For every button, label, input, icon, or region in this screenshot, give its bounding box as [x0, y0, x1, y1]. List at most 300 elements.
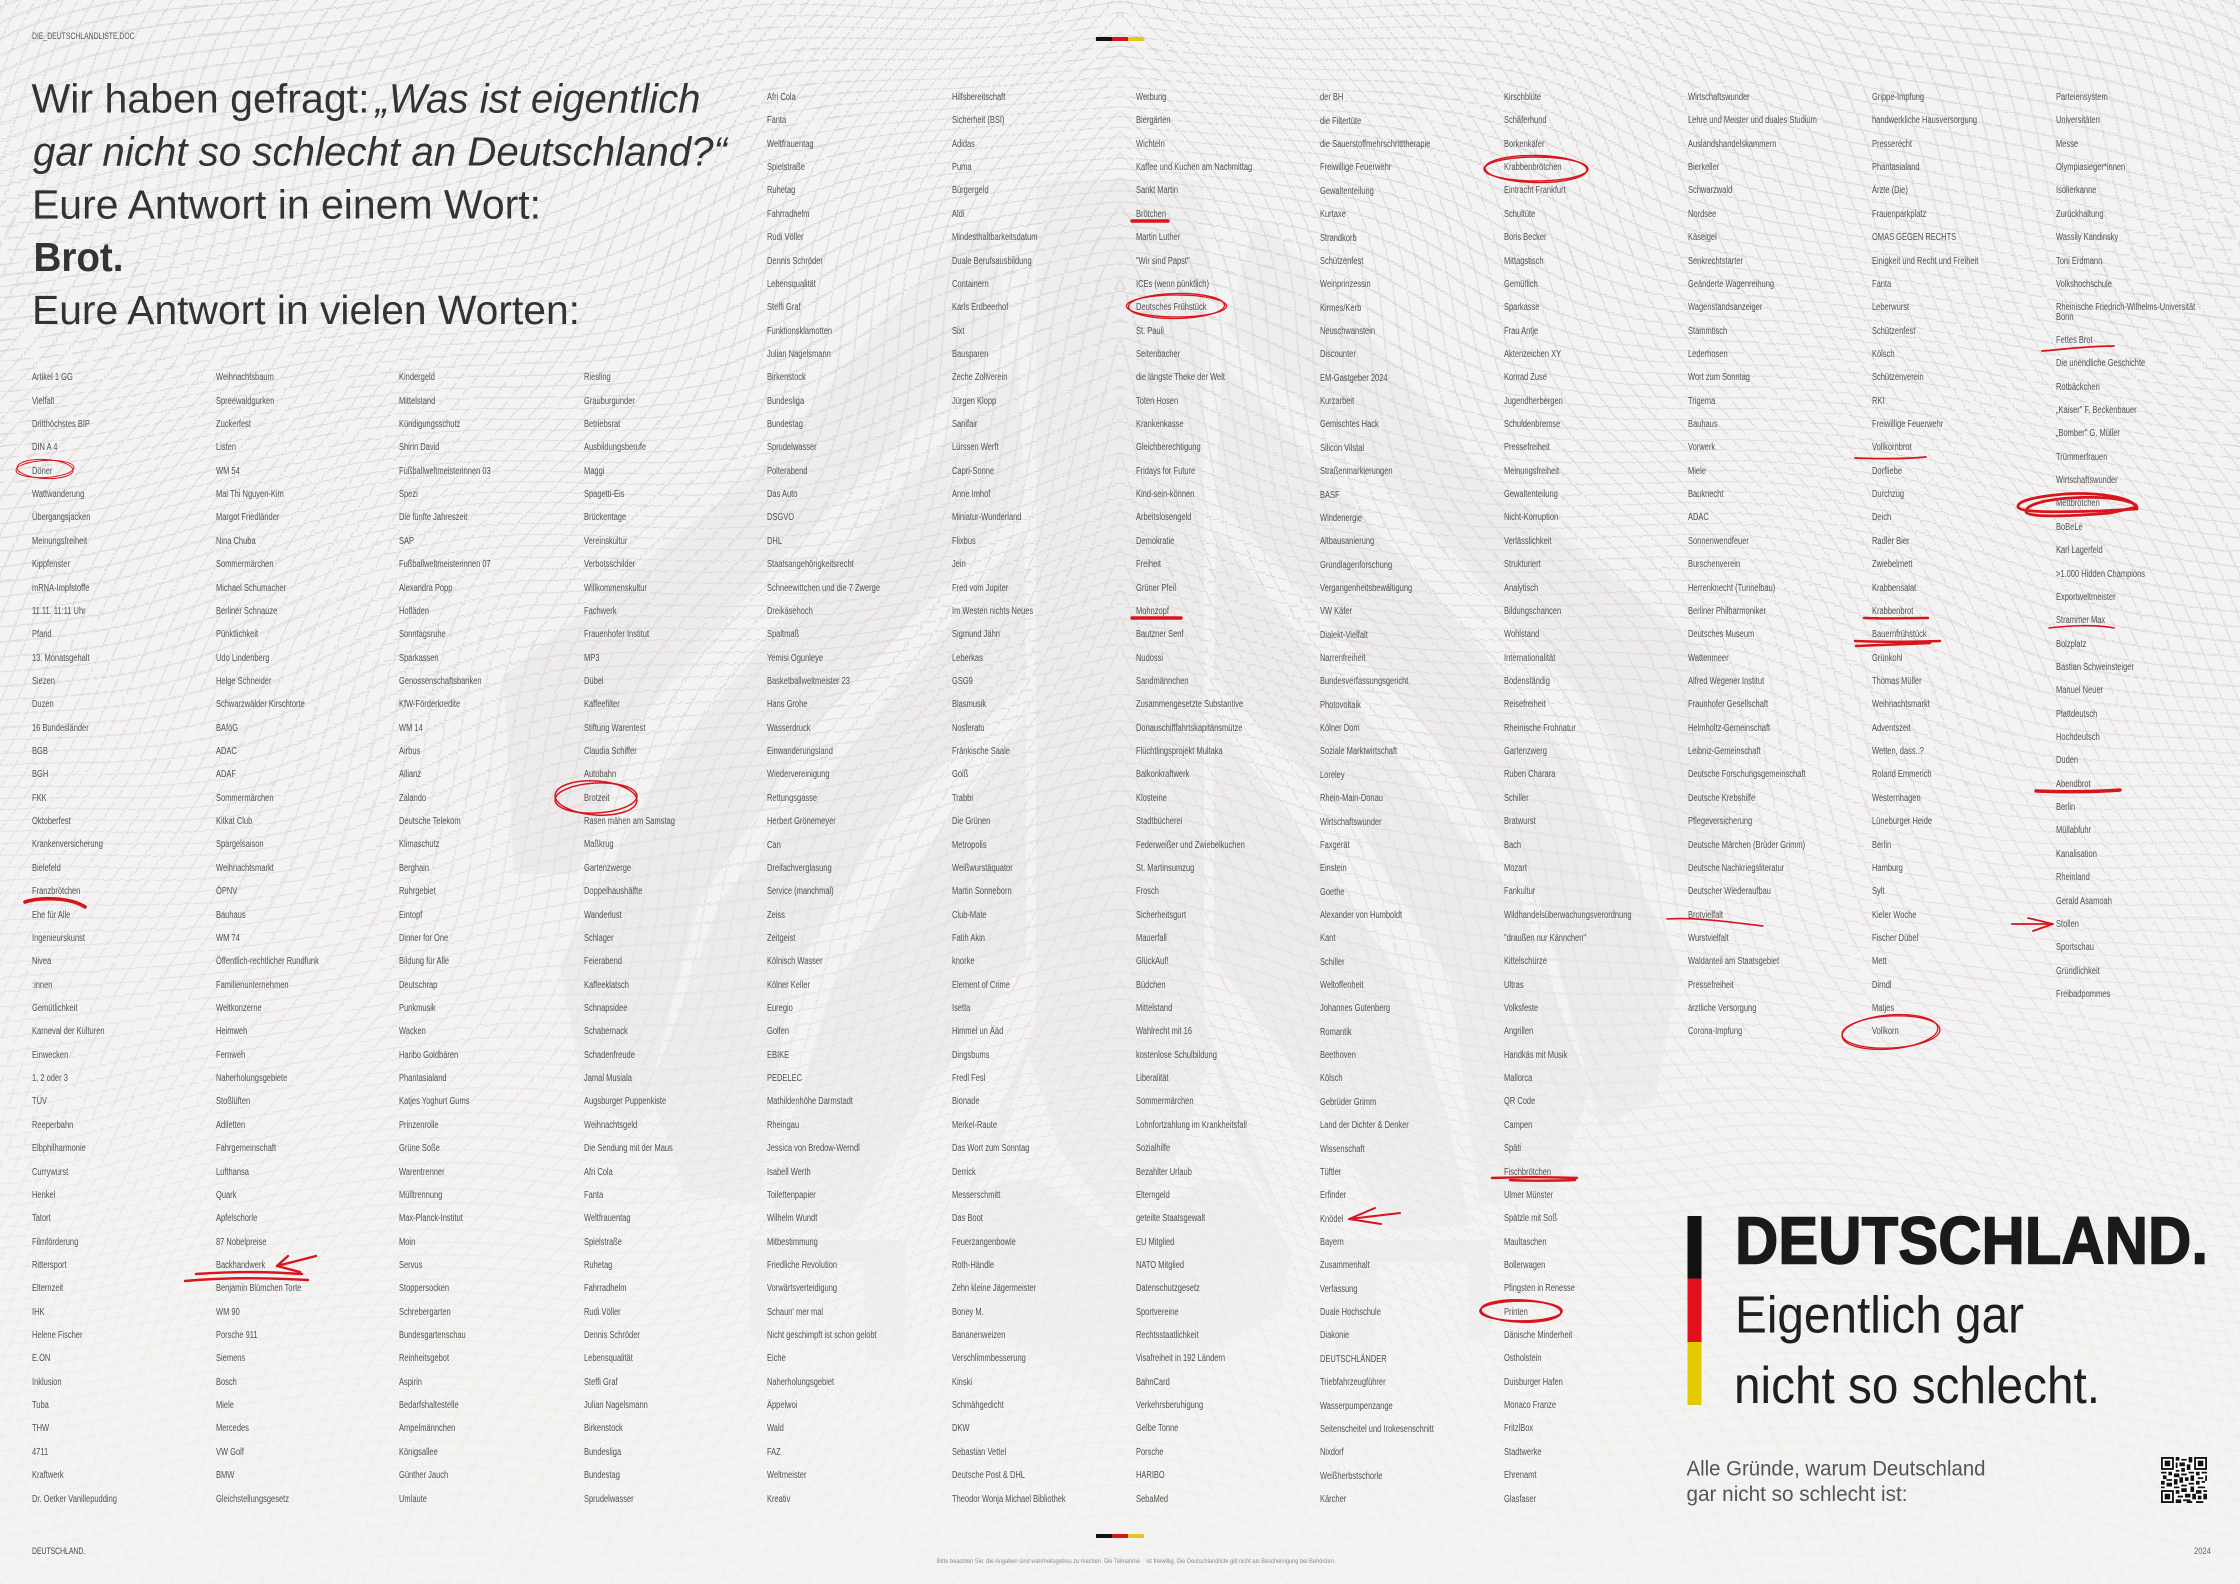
answer column 9: Schultüte	[1504, 209, 1535, 220]
answer column 6: Fränkische Saale	[952, 746, 1010, 757]
answer column 2: Weihnachtsbaum	[216, 372, 274, 383]
answer column 3: Allianz	[399, 769, 421, 780]
answer column 2: Quark	[216, 1190, 236, 1201]
answer column 4: Grauburgunder	[584, 396, 634, 407]
answer column 9: Frau Antje	[1504, 326, 1538, 337]
answer column 5: Äppelwoi	[767, 1400, 798, 1411]
answer column 5: Bundestag	[767, 419, 803, 430]
answer column 11: Krabbenbrot	[1872, 606, 1913, 617]
answer column 9: Fischbrötchen	[1504, 1167, 1551, 1178]
answer column 2: Siemens	[216, 1353, 245, 1364]
answer column 4: Spagetti-Eis	[584, 489, 624, 500]
answer column 6: Bürgergeld	[952, 185, 988, 196]
answer column 12: Rheinland	[2056, 872, 2090, 883]
answer column 5	[767, 92, 880, 1505]
answer column 9: Bildungschancen	[1504, 606, 1561, 617]
answer column 5: Service (manchmal)	[767, 886, 834, 897]
answer column 8: die Filtertüte	[1320, 116, 1361, 127]
answer column 5: Golfen	[767, 1026, 789, 1037]
answer column 8: VW Käfer	[1320, 606, 1352, 617]
answer column 3: Klimaschutz	[399, 839, 440, 850]
headline: Eure Antwort in vielen Worten:	[32, 287, 580, 333]
answer column 7: Freiheit	[1136, 559, 1161, 570]
answer column 5: PEDELEC	[767, 1073, 802, 1084]
answer column 6: Aldi	[952, 209, 964, 220]
answer column 6: Zeche Zollverein	[952, 372, 1007, 383]
answer column 9: Schuldenbremse	[1504, 419, 1560, 430]
answer column 2: Benjamin Blümchen Torte	[216, 1283, 301, 1294]
answer column 8: Romantik	[1320, 1027, 1352, 1038]
answer column 4: MP3	[584, 653, 599, 664]
answer column 1: Kraftwerk	[32, 1470, 63, 1481]
answer column 8: Kurzarbeit	[1320, 396, 1354, 407]
answer column 6: Karls Erdbeerhof	[952, 302, 1008, 313]
underline: Strammer Max	[2049, 626, 2114, 628]
answer column 3: Die fünfte Jahreszeit	[399, 512, 468, 523]
headline: Eure Antwort in einem Wort:	[32, 181, 541, 227]
answer column 8: Duale Hochschule	[1320, 1307, 1381, 1318]
answer column 9: Monaco Franze	[1504, 1400, 1556, 1411]
headline: Wir haben gefragt:	[32, 76, 370, 122]
answer column 9: Bach	[1504, 840, 1521, 850]
answer column 11: Grünkohl	[1872, 653, 1902, 664]
answer column 5: Julian Nagelsmann	[767, 349, 831, 360]
answer column 6: Das Wort zum Sonntag	[952, 1143, 1029, 1154]
answer column 9: Späti	[1504, 1143, 1521, 1154]
answer column 5: Weltmeister	[767, 1470, 807, 1481]
answer column 8	[1320, 92, 1434, 1505]
answer column 9: Dänische Minderheit	[1504, 1330, 1573, 1341]
answer column 1: Inklusion	[32, 1377, 61, 1388]
answer column 10: Corona-Impfung	[1688, 1026, 1742, 1037]
answer column 8: Wirtschaftswunder	[1320, 817, 1382, 828]
answer column 2: Porsche 911	[216, 1330, 257, 1341]
answer column 7: Flüchtlingsprojekt Multaka	[1136, 746, 1222, 757]
answer column 4: Die Sendung mit der Maus	[584, 1143, 672, 1154]
answer column 6: Dingsbums	[952, 1050, 989, 1061]
year: 2024	[2194, 1546, 2211, 1556]
answer column 2: Margot Friedländer	[216, 512, 279, 523]
circle: Brotzeit	[554, 778, 638, 818]
answer column 7: Nudossi	[1136, 653, 1163, 664]
answer column 5: Rheingau	[767, 1120, 800, 1131]
answer column 7: Gelbe Tonne	[1136, 1423, 1178, 1434]
flag bar bottom	[1096, 1534, 1144, 1538]
scribble: Mettbrötchen	[2018, 494, 2137, 516]
answer column 9: Schiller	[1504, 793, 1529, 804]
answer column 1: BGB	[32, 746, 47, 757]
answer column 1: 4711	[32, 1447, 48, 1458]
answer column 12: >1.000 Hidden Champions	[2056, 569, 2145, 580]
answer column 10: ADAC	[1688, 512, 1709, 523]
answer column 9: Strukturiert	[1504, 559, 1541, 570]
answer column 3: Hofläden	[399, 606, 429, 617]
answer column 2: Sommermärchen	[216, 559, 273, 570]
answer column 5: Schaun' mer mal	[767, 1307, 823, 1318]
answer column 1: Meinungsfreiheit	[32, 536, 87, 547]
answer column 12: Gerald Asamoah	[2056, 896, 2112, 907]
answer column 9: Kirschblüte	[1504, 92, 1541, 103]
answer column 5: Yemisi Ogunleye	[767, 653, 823, 664]
answer column 10: Bauhaus	[1688, 419, 1718, 430]
answer column 6: DKW	[952, 1423, 969, 1434]
answer column 8: Soziale Marktwirtschaft	[1320, 746, 1397, 757]
answer column 8: Verfassung	[1320, 1284, 1358, 1295]
answer column 8: Kölsch	[1320, 1073, 1343, 1084]
answer column 9: Borkenkäfer	[1504, 139, 1545, 150]
answer column 8: Bayern	[1320, 1237, 1344, 1248]
answer column 6: Fatih Akin	[952, 933, 985, 944]
answer column 12: Strammer Max	[2056, 615, 2105, 626]
answer column 1: Siezen	[32, 676, 54, 687]
eagle watermark	[504, 180, 1736, 1405]
answer column 3: Fußballweltmeisterinnen 07	[399, 559, 491, 570]
answer column 3: Shirin David	[399, 442, 440, 453]
answer column 3: Zalando	[399, 793, 426, 804]
answer column 7: EU Mitglied	[1136, 1237, 1174, 1248]
answer column 4: Gartenzwerge	[584, 863, 631, 874]
answer column 9: Printen	[1504, 1307, 1528, 1318]
answer column 8: Wissenschaft	[1320, 1144, 1365, 1155]
answer column 11: Fischer Dübel	[1872, 933, 1918, 944]
answer column 9: Stadtwerke	[1504, 1447, 1542, 1458]
answer column 7: Sozialhilfe	[1136, 1143, 1170, 1154]
answer column 8: Weltoffenheit	[1320, 980, 1364, 991]
answer column 11: RKI	[1872, 396, 1885, 407]
answer column 7: Wahlrecht mit 16	[1136, 1026, 1192, 1037]
answer column 8: Straßenmarkierungen	[1320, 466, 1393, 477]
answer column 11: Presserecht	[1872, 139, 1912, 150]
answer column 10: Lehre und Meister und duales Studium	[1688, 115, 1817, 126]
answer column 11: Zwiebelmett	[1872, 559, 1912, 570]
answer column 12: Müllabfuhr	[2056, 825, 2091, 836]
call to action	[1686, 1458, 1986, 1506]
answer column 9: Schäferhund	[1504, 115, 1547, 126]
answer column 3: Haribo Goldbären	[399, 1050, 459, 1061]
answer column 9: Volksfeste	[1504, 1003, 1538, 1014]
answer column 1: Pfand	[32, 629, 51, 640]
answer column 7: Wichteln	[1136, 139, 1164, 150]
answer column 1: 11.11. 11:11 Uhr	[32, 606, 85, 617]
answer column 11: Krabbensalat	[1872, 583, 1916, 594]
answer column 7: Sportvereine	[1136, 1307, 1178, 1318]
answer column 6: Schmähgedicht	[952, 1400, 1003, 1411]
answer column 6: Himmel un Ääd	[952, 1026, 1003, 1037]
answer column 4: Maggi	[584, 466, 604, 477]
answer column 10: Pressefreiheit	[1688, 980, 1734, 991]
answer column 10: Sonnenwendfeuer	[1688, 536, 1749, 547]
answer column 8: Faxgerät	[1320, 840, 1350, 851]
answer column 1: Helene Fischer	[32, 1330, 82, 1341]
answer column 7: Büdchen	[1136, 980, 1165, 991]
answer column 5: Zeiss	[767, 910, 785, 921]
answer column 4: Weltfrauentag	[584, 1213, 630, 1224]
answer column 3: Warentrenner	[399, 1167, 445, 1178]
answer column 7: Sommermärchen	[1136, 1096, 1193, 1107]
answer column 4: Schabernack	[584, 1026, 627, 1037]
answer column 7: Donauschifffahrtskapitänsmütze	[1136, 723, 1242, 734]
answer column 6: Mindesthaltbarkeitsdatum	[952, 232, 1037, 243]
answer column 4: Steffi Graf	[584, 1377, 617, 1388]
answer column 3: Schrebergarten	[399, 1307, 451, 1318]
answer column 1: Karneval der Kulturen	[32, 1026, 104, 1037]
answer column 12: Hochdeutsch	[2056, 732, 2100, 743]
answer column 5: Mathildenhöhe Darmstadt	[767, 1096, 853, 1107]
answer column 2: Kitkat Club	[216, 816, 252, 827]
answer column 6: Goiß	[952, 769, 968, 780]
answer column 11: Mett	[1872, 956, 1887, 967]
answer column 12: Messe	[2056, 139, 2078, 150]
answer column 9: Eintracht Frankfurt	[1504, 185, 1566, 196]
answer column 5: Wilhelm Wundt	[767, 1213, 818, 1224]
answer column 5: Eiche	[767, 1353, 786, 1364]
answer column 8: Knödel	[1320, 1214, 1343, 1225]
answer column 11: Schützenverein	[1872, 372, 1924, 383]
answer column 8: Silicon Vilstal	[1320, 443, 1364, 454]
answer column 7	[1136, 92, 1252, 1505]
answer column 8: Land der Dichter & Denker	[1320, 1120, 1409, 1131]
answer column 1: Einwecken	[32, 1050, 68, 1061]
answer column 6: Element of Crime	[952, 980, 1010, 991]
circle: Döner	[16, 458, 74, 480]
answer column 1: Duzen	[32, 699, 53, 710]
answer column 2: Bauhaus	[216, 910, 245, 921]
answer column 1: Ehe für Alle	[32, 910, 70, 921]
answer column 1: DIN A 4	[32, 442, 57, 453]
answer column 5: Schneewittchen und die 7 Zwerge	[767, 583, 880, 594]
answer column 5: Spaltmaß	[767, 629, 799, 640]
answer column 7: Verkehrsberuhigung	[1136, 1400, 1203, 1411]
answer column 8: die Sauerstoffmehrschritttherapie	[1320, 139, 1430, 150]
answer column 11: Leberwurst	[1872, 302, 1909, 313]
answer column 4: Lebensqualität	[584, 1353, 632, 1364]
answer column 1: IHK	[32, 1307, 44, 1318]
answer column 4: Doppelhaushälfte	[584, 886, 642, 897]
answer column 6: Capri-Sonne	[952, 466, 994, 477]
answer column 6: Martin Sonneborn	[952, 886, 1011, 897]
answer column 11: Dorfliebe	[1872, 466, 1902, 477]
answer column 2: Helge Schneider	[216, 676, 271, 687]
underline: Brotvielfalt	[1667, 919, 1763, 926]
answer column 6: GSG9	[952, 676, 972, 687]
answer column 12: Mettbrötchen	[2056, 498, 2100, 509]
answer column 9: Reisefreiheit	[1504, 699, 1546, 710]
answer column 3: Mülltrennung	[399, 1190, 443, 1201]
answer column 8: Diakonie	[1320, 1330, 1349, 1341]
answer column 2	[216, 372, 319, 1505]
answer column 11: Vollkornbrot	[1872, 442, 1912, 453]
answer column 4: Rasen mähen am Samstag	[584, 816, 674, 827]
answer column 9: Ultras	[1504, 980, 1524, 991]
answer column 11: Radler Bier	[1872, 536, 1910, 547]
answer column 9: Sparkasse	[1504, 302, 1540, 313]
logo flag bar	[1688, 1216, 1702, 1405]
answer column 9: Jugendherbergen	[1504, 396, 1563, 407]
answer column 2: Mercedes	[216, 1423, 249, 1434]
answer column 10: Bierkeller	[1688, 162, 1719, 173]
answer column 11: Thomas Müller	[1872, 676, 1922, 687]
answer column 7: Demokratie	[1136, 536, 1174, 547]
answer column 11: Weihnachtsmarkt	[1872, 699, 1930, 710]
answer column 2: Miele	[216, 1400, 234, 1411]
answer column 5: Spielstraße	[767, 162, 805, 173]
answer column 5: Naherholungsgebiet	[767, 1377, 835, 1388]
answer column 3: Sonntagsruhe	[399, 629, 446, 640]
answer column 5: Dreifachverglasung	[767, 863, 832, 874]
underline: Abendbrot	[2036, 790, 2120, 792]
answer column 9: Maultaschen	[1504, 1237, 1547, 1248]
answer column 1: Ingenieurskunst	[32, 933, 84, 944]
answer column 6: Containern	[952, 279, 988, 290]
answer column 1: Vielfalt	[32, 396, 54, 407]
answer column 8: Alexander von Humboldt	[1320, 910, 1402, 921]
answer column 9: Krabbenbrötchen	[1504, 162, 1562, 173]
answer column 8: Johannes Gutenberg	[1320, 1003, 1390, 1014]
answer column 1: Dr. Oetker Vanillepudding	[32, 1494, 116, 1505]
answer column 12: Gründlichkeit	[2056, 966, 2100, 977]
answer column 1: BGH	[32, 769, 48, 780]
answer column 7: Datenschutzgesetz	[1136, 1283, 1199, 1294]
answer column 6: Miniatur-Wunderland	[952, 512, 1021, 523]
answer column 12: Olympiasieger*innen	[2056, 162, 2125, 173]
answer column 3: Sparkassen	[399, 653, 439, 664]
answer column 9: Boris Becker	[1504, 232, 1547, 243]
answer column 7: geteilte Staatsgewalt	[1136, 1213, 1205, 1224]
answer column 1: 16 Bundesländer	[32, 723, 88, 734]
answer column 10: Waldanteil am Staatsgebiet	[1688, 956, 1779, 967]
answer column 5: Isabell Werth	[767, 1167, 811, 1178]
answer column 3: Fußballweltmeisterinnen 03	[399, 466, 491, 477]
answer column 11: Phantasialand	[1872, 162, 1920, 173]
answer column 10: Deutsche Forschungsgemeinschaft	[1688, 769, 1806, 780]
answer column 2: Fernweh	[216, 1050, 245, 1061]
answer column 8: Altbausanierung	[1320, 536, 1374, 547]
answer column 12: Sportschau	[2056, 942, 2094, 953]
answer column 7: Bautzner Senf	[1136, 629, 1183, 640]
answer column 1: Dritthöchstes BIP	[32, 419, 89, 430]
answer column 9: Bratwurst	[1504, 816, 1536, 827]
answer column 4: Ruhetag	[584, 1260, 612, 1271]
answer column 4: Kaffeefilter	[584, 699, 619, 710]
answer column 5: Birkenstock	[767, 372, 806, 383]
call to action: Alle Gründe, warum Deutschland	[1686, 1458, 1986, 1480]
circle: Krabbenbrötchen	[1484, 155, 1588, 183]
answer column 5: Friedliche Revolution	[767, 1260, 837, 1271]
answer column 1	[32, 372, 116, 1505]
answer column 9: Aktenzeichen XY	[1504, 349, 1561, 360]
answer column 10: Deutsche Märchen (Brüder Grimm)	[1688, 840, 1805, 850]
answer column 9: Ruben Charara	[1504, 769, 1555, 780]
answer column 8: Einstein	[1320, 863, 1347, 874]
answer column 10: Wattenmeer	[1688, 653, 1729, 664]
answer column 9: Wohlstand	[1504, 629, 1539, 640]
answer column 6: Adidas	[952, 139, 975, 150]
answer column 1: Oktoberfest	[32, 816, 70, 827]
answer column 11: handwerkliche Hausversorgung	[1872, 115, 1977, 126]
answer column 10: Stammtisch	[1688, 326, 1727, 337]
answer column 2: Nina Chuba	[216, 536, 255, 547]
answer column 7: Kind-sein-können	[1136, 489, 1194, 500]
answer column 11: Dirndl	[1872, 980, 1892, 991]
answer column 9: Kittelschürze	[1504, 956, 1547, 967]
answer column 8: DEUTSCHLÄNDER	[1320, 1354, 1387, 1365]
answer column 11: Westernhagen	[1872, 793, 1921, 804]
answer column 12: „Bomber" G. Müller	[2056, 428, 2120, 439]
answer column 2: WM 74	[216, 933, 239, 944]
answer column 2: 87 Nobelpreise	[216, 1237, 266, 1248]
answer column 1: Filmförderung	[32, 1237, 78, 1248]
answer column 5: Rettungsgasse	[767, 793, 817, 804]
answer column 9: "draußen nur Kännchen"	[1504, 933, 1586, 944]
answer column 2: ADAF	[216, 769, 236, 780]
answer column 7: Stadtbücherei	[1136, 816, 1182, 827]
answer column 7: Grüner Pfeil	[1136, 583, 1176, 594]
logo subtitle: Eigentlich gar	[1735, 1287, 2024, 1345]
answer column 11: Vollkorn	[1872, 1026, 1899, 1037]
answer column 7: Liberalität	[1136, 1073, 1168, 1084]
answer column 1: THW	[32, 1423, 49, 1434]
answer column 5: Can	[767, 840, 781, 850]
answer column 3: Stoppersocken	[399, 1283, 449, 1294]
answer column 6: Jürgen Klopp	[952, 396, 996, 407]
file name tag: DIE_DEUTSCHLANDLISTE.DOC	[32, 31, 134, 42]
answer column 1: Übergangsjacken	[32, 512, 90, 523]
answer column 9: Mallorca	[1504, 1073, 1533, 1084]
headline: „Was ist eigentlich	[374, 76, 700, 122]
underline: Mohnzopf	[1132, 616, 1181, 620]
answer column 8: Tüftler	[1320, 1167, 1341, 1178]
answer column 1: Currywurst	[32, 1167, 68, 1178]
answer column 12: „Kaiser" F. Beckenbauer	[2056, 405, 2137, 416]
answer column 7: Elterngeld	[1136, 1190, 1169, 1201]
answer column 9: Glasfaser	[1504, 1494, 1536, 1505]
answer column 8: Gemischtes Hack	[1320, 419, 1379, 430]
answer column 12: BoBeLe	[2056, 522, 2083, 533]
answer column 7: Biergärten	[1136, 115, 1170, 126]
answer column 8: Triebfahrzeugführer	[1320, 1377, 1386, 1388]
answer column 4: Betriebsrat	[584, 419, 620, 430]
answer column 10: Senkrechtstarter	[1688, 256, 1743, 267]
answer column 11: Bauernfrühstück	[1872, 629, 1927, 640]
answer column 1: 1, 2 oder 3	[32, 1073, 67, 1084]
answer column 1: mRNA-Impfstoffe	[32, 583, 89, 594]
answer column 2: Backhandwerk	[216, 1260, 265, 1271]
answer column 2: Spreewaldgurken	[216, 396, 274, 407]
answer column 7: Kaffee und Kuchen am Nachmittag	[1136, 162, 1252, 173]
answer column 7: ICEs (wenn pünktlich)	[1136, 279, 1209, 290]
answer column 8: BASF	[1320, 490, 1340, 500]
answer column 4: Sprudelwasser	[584, 1494, 633, 1505]
answer column 5: Herbert Grönemeyer	[767, 816, 836, 827]
answer column 7: Seitenbacher	[1136, 349, 1180, 360]
answer column 12: Trümmerfrauen	[2056, 452, 2107, 463]
answer column 3: Günther Jauch	[399, 1470, 449, 1481]
answer column 12: Plattdeutsch	[2056, 709, 2097, 720]
answer column 12: Abendbrot	[2056, 779, 2091, 790]
answer column 3: Servus	[399, 1260, 423, 1271]
answer column 3	[399, 372, 491, 1505]
answer column 6: Kinski	[952, 1377, 972, 1388]
answer column 10: Fraunhofer Gesellschaft	[1688, 699, 1768, 710]
answer column 6: Das Boot	[952, 1213, 982, 1224]
answer column 12: Rheinische Friedrich-Wilhelms-Universität	[2056, 302, 2195, 313]
answer column 6: Puma	[952, 162, 971, 173]
answer column 1: 13. Monatsgehalt	[32, 653, 89, 664]
answer column 2: Berliner Schnauze	[216, 606, 277, 617]
answer column 2: Pünktlichkeit	[216, 629, 258, 640]
underline: Vollkornbrot	[1855, 457, 1926, 459]
answer column 9: Duisburger Hafen	[1504, 1377, 1563, 1388]
